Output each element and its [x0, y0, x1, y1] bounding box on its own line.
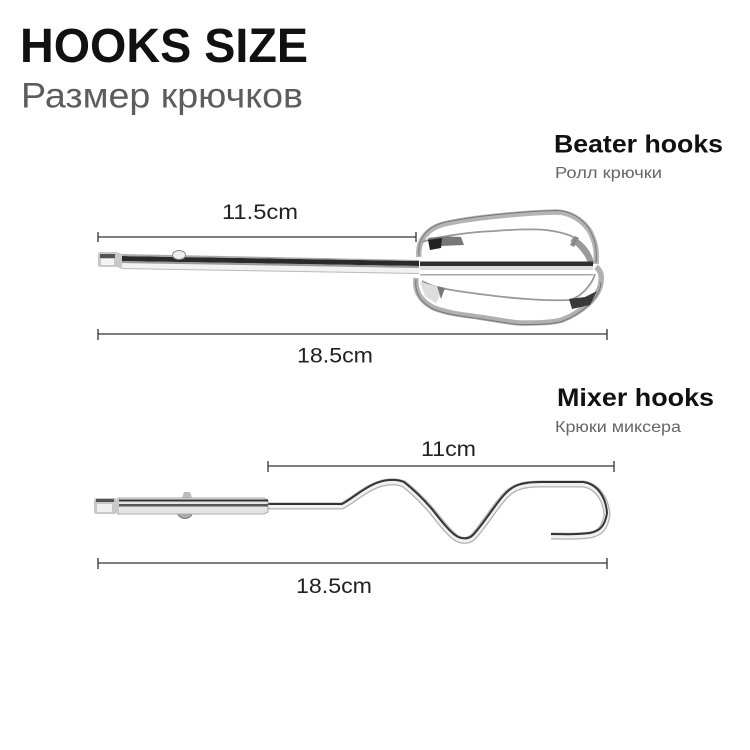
subtitle: Размер крючков [21, 76, 303, 116]
mixer hook tip [94, 498, 119, 514]
dimension: 11.5cm [98, 201, 416, 242]
mixer hook bumps [182, 492, 192, 498]
dimension: 11.5cm: 11.5cm [222, 201, 298, 224]
dimension: 18.5cm mixer [98, 558, 607, 598]
beater shaft [122, 254, 419, 274]
dimension: 11cm: 11cm [421, 438, 476, 461]
mixer hook wire [268, 482, 607, 540]
beater inner rod [420, 262, 593, 266]
beater hook illustration [98, 210, 601, 325]
beater outer blades [419, 212, 596, 264]
beater shaft tip [98, 252, 122, 269]
title: HOOKS SIZE [20, 20, 308, 73]
dimension: 11cm [268, 438, 614, 472]
beater inner blades [422, 229, 593, 264]
dimension: 18.5cm beater [98, 329, 607, 368]
caption: mixer hooks russian: Крюки миксера [555, 419, 681, 436]
caption: beater hooks russian: Ролл крючки [555, 165, 662, 182]
heading: mixer hooks: Mixer hooks [557, 384, 714, 412]
heading: beater hooks: Beater hooks [554, 130, 723, 158]
dimension: 18.5cm mixer: 18.5cm [296, 575, 372, 598]
mixer hook illustration [94, 480, 607, 540]
mixer hook shaft [118, 498, 268, 514]
dimension: 18.5cm beater: 18.5cm [297, 344, 373, 368]
